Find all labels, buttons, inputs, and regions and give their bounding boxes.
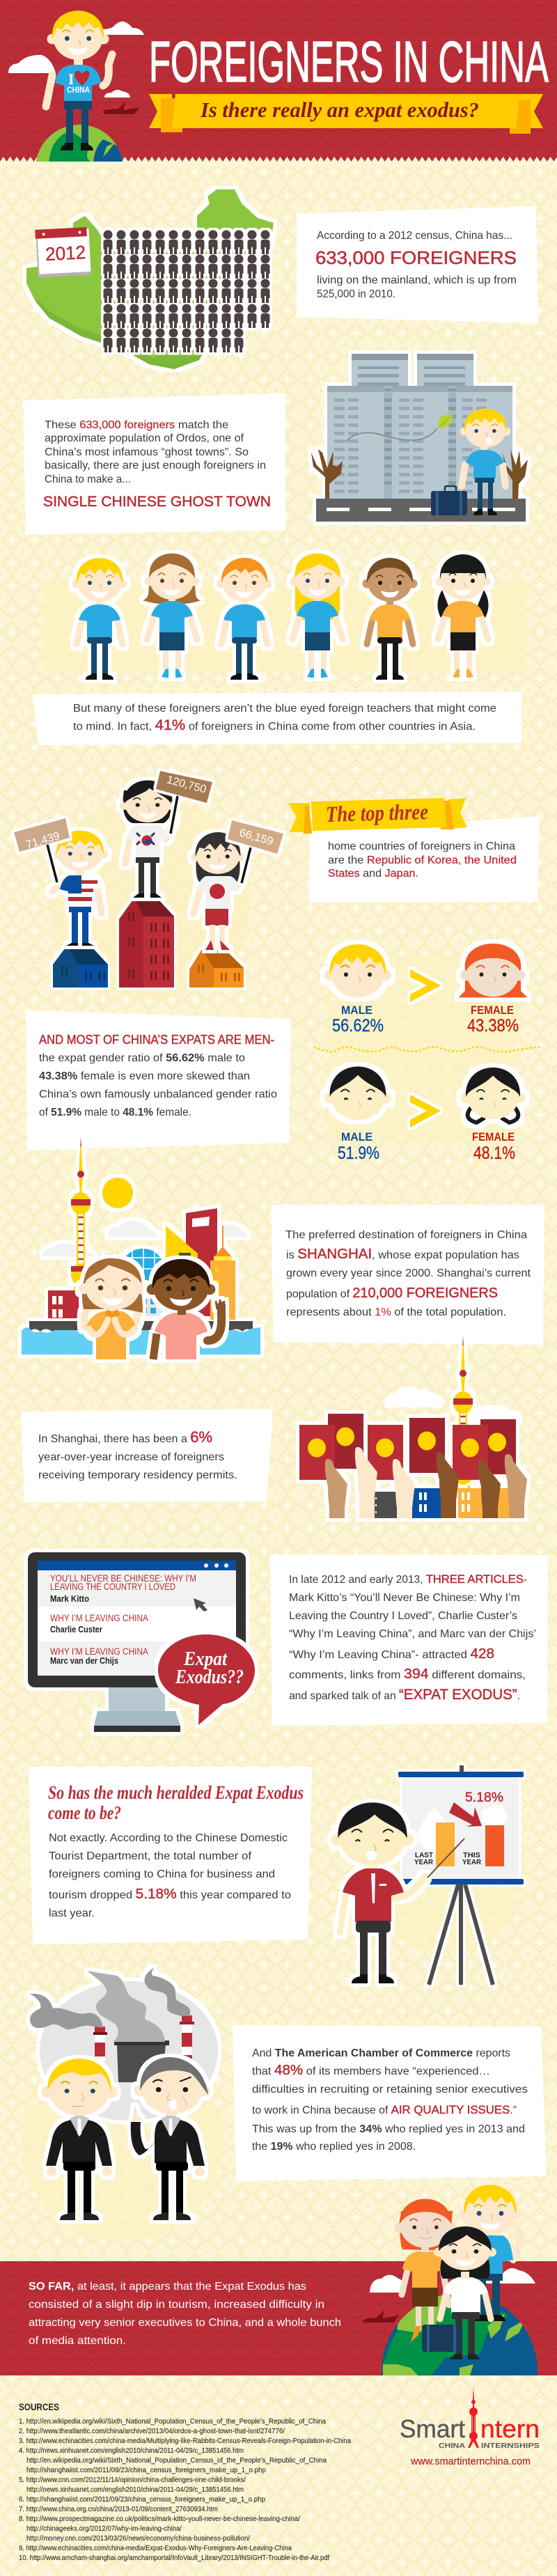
speech bubble: Expat Exodus??: Exodus?? [175, 1666, 244, 1688]
monitor article list: LEAVING THE COUNTRY I LOVED [50, 1582, 175, 1592]
panel: ghost town text: China to make a... [45, 474, 131, 485]
character: boy in I love China shirt [46, 10, 112, 150]
raised hands [323, 1447, 531, 1522]
panel: most expats are men: the expat gender ratio of 56.62% male to [39, 1052, 245, 1064]
panel: three articles: “Why I’m Leaving China”, and Marc van der Chijs’ [289, 1628, 536, 1640]
label: this year [462, 1851, 481, 1866]
subtitle: Is there really an expat exodus? [200, 97, 479, 122]
city buildings [372, 1492, 398, 1518]
monitor article list: Mark Kitto [50, 1593, 89, 1604]
panel: the top three: home countries of foreigners in China [328, 841, 515, 852]
icon: plane [363, 2310, 399, 2323]
panel: exodus question: Tourist Department, the total number of [49, 1850, 252, 1862]
illustration: presenter and flip chart [331, 1765, 524, 1985]
sources list: 3. http://www.echinacities.com/china-media/Multiplying-like-Rabbits-Census-Reveals-Foreign-Population-in-China [19, 2437, 351, 2445]
monitor article list: WHY I’M LEAVING CHINA [50, 1646, 148, 1657]
panel: three articles: “Why I’m Leaving China”- attracted 428 [289, 1646, 494, 1662]
illustration: monitor with articles [28, 1552, 246, 1732]
monitor article list: Marc van der Chijs [50, 1655, 118, 1666]
clouds [389, 1391, 519, 1421]
sources list: http://shanghaiist.com/2011/09/23/china_census_foreigners_make_up_1_o.php [26, 2466, 266, 2474]
panel: Shanghai: population of 210,000 FOREIGNERS [286, 1286, 498, 1301]
label: last year: YEAR [414, 1858, 433, 1866]
panel: most expats are men: 43.38% female is even more skewed than [39, 1070, 250, 1082]
panel: three articles: Leaving the Country I Loved”, Charlie Custer’s [289, 1610, 517, 1622]
sign: 71,439 [14, 818, 70, 882]
pale circle behind presenter [366, 1793, 526, 1953]
characters: six foreigners [72, 554, 490, 680]
panel: Shanghai: The preferred destination of foreigners in China [285, 1229, 527, 1241]
panel: the top three: States and Japan. [328, 868, 418, 880]
population pictogram: 633,000 foreigners [103, 230, 270, 352]
panel: census: living on the mainland, which is up from [317, 274, 517, 286]
person: blonde woman [290, 554, 345, 678]
panel: air quality: This was up from the 34% who replied yes in 2013 and [252, 2123, 525, 2135]
character: boy in I love China shirt: I [68, 70, 74, 88]
clouds [43, 1221, 248, 1256]
icon: mouse cursor [194, 1598, 207, 1611]
sign: 71,439: 71,439 [24, 830, 61, 851]
panel: three articles: and sparked talk of an “EXPAT EXODUS”. [289, 1687, 520, 1703]
panel: Shanghai: represents about 1% of the total population. [286, 1306, 506, 1318]
panel: ghost town text: basically, there are just enough foreigners in [45, 460, 266, 471]
icon: globe [382, 2294, 538, 2375]
logo: Smart Intern [400, 2387, 540, 2467]
chart: expat gender ratio [315, 944, 542, 1163]
chart: expat gender ratio: FEMALE [472, 1130, 515, 1143]
panel: ghost town text: approximate population of Ordos, one of [45, 432, 244, 444]
pale band behind people [43, 581, 526, 671]
sources list: 7. http://www.china.org.cn/china/2013-01/09/content_27630934.htm [19, 2505, 218, 2513]
label: 5.18%: 5.18% [465, 1790, 503, 1805]
sign: 66,159 [228, 820, 283, 883]
boat [29, 1321, 253, 1332]
person: Korean with flag shirt [120, 781, 175, 898]
person: grey-haired executive [131, 2057, 210, 2220]
character: lone boy with suitcase [431, 409, 510, 515]
chart: expat gender ratio: 56.62% [332, 1016, 384, 1036]
label: this year: YEAR [462, 1858, 481, 1866]
panel: census [297, 206, 538, 323]
sources list: http://news.xinhuanet.com/english2010/china/2011-04/29/c_13851456.htm [26, 2485, 244, 2494]
monitor article list: YOU’LL NEVER BE CHINESE: WHY I’M [50, 1573, 196, 1584]
sources list [19, 2401, 351, 2562]
panel: exodus question: tourism dropped 5.18% this year compared to [49, 1887, 291, 1902]
illustration: friends on globe [363, 2185, 538, 2375]
icon: suitcase [431, 486, 467, 515]
sources list: 2. http://www.theatlantic.com/china/archive/2013/04/ordos-a-ghost-town-that-isnt/274776/ [19, 2427, 285, 2435]
panel: most expats are men: AND MOST OF CHINA’S EXPATS ARE MEN- [39, 1033, 274, 1047]
panel: Shanghai: is SHANGHAI, whose expat population has [286, 1247, 519, 1262]
panel: most expats are men: of 51.9% male to 48.1% female. [39, 1107, 191, 1118]
panel: exodus question: last year. [49, 1907, 95, 1919]
sources list: 4. http://news.xinhuanet.com/english2010/china/2011-04/29/c_13851456.htm [19, 2446, 244, 2455]
panel: three articles: comments, links from 394 different domains, [289, 1666, 526, 1682]
smoke [30, 1994, 103, 2029]
logo: Smart Intern: Smart [400, 2414, 465, 2443]
person: boy waving [147, 1259, 224, 1359]
panel: 6% increase: year-over-year increase of foreigners [38, 1451, 224, 1463]
chart: expat gender ratio: 51.9% [338, 1143, 379, 1163]
person: red-haired girl [394, 2199, 457, 2342]
face: expat female [458, 944, 528, 997]
person: American with flag shirt [52, 831, 108, 946]
face: Chinese male [324, 1067, 391, 1120]
person: girl with clasped hands [79, 1258, 147, 1359]
subtitle ribbon [149, 94, 543, 134]
sources list: http://chinageeks.org/2012/07/why-im-leaving-china/ [26, 2524, 182, 2533]
panel: most expats are men [26, 1010, 291, 1150]
logo: Smart Intern: CHINA [439, 2442, 465, 2450]
monitor article list: WHY I’M LEAVING CHINA [50, 1613, 148, 1623]
sources list: SOURCES [19, 2401, 59, 2412]
person: Asian woman [436, 554, 490, 678]
sign: 120,750: 120,750 [166, 774, 207, 796]
person: red-haired man [217, 558, 272, 680]
panel: 41% from Asia [33, 692, 521, 745]
building: Korea [119, 898, 174, 988]
footer banner: conclusion [0, 2261, 557, 2375]
panel: 41% from Asia: But many of these foreigners aren’t the blue eyed foreign teachers that might come [73, 703, 496, 715]
arrow down [449, 1802, 482, 1827]
sources list: 6. http://shanghaiist.com/2011/09/23/china_census_foreigners_make_up_1_o.php [19, 2495, 265, 2504]
logo: Smart Intern: www.smartinternchina.com [410, 2456, 531, 2467]
panel: 41% from Asia: to mind. In fact, 41% of foreigners in China come from other countries in Asia. [73, 717, 476, 733]
pale circle behind executives [21, 2040, 223, 2242]
label: this year: THIS [463, 1851, 480, 1859]
pointer stick [427, 1839, 464, 1878]
footer banner: conclusion: attracting very senior executives to China, and a whole bunch [29, 2317, 341, 2329]
label: last year [414, 1851, 434, 1866]
panel: ghost town text [23, 393, 285, 535]
person: presenter [331, 1802, 425, 1983]
chart: expat gender ratio: FEMALE [471, 1004, 514, 1017]
illustration: empty ghost town buildings [311, 354, 528, 522]
person: blonde boy waving [459, 2185, 521, 2321]
bars [436, 1822, 455, 1866]
clouds [370, 2268, 535, 2293]
front passports [299, 1425, 488, 1480]
flip chart [398, 1765, 524, 1985]
monitor article list: Charlie Custer [50, 1624, 102, 1634]
person: brown-haired woman [143, 554, 201, 678]
panel: ghost town text: China’s most infamous “ghost towns”. So [45, 446, 249, 458]
sources list: 9. http://www.echinacities.com/china-media/Expat-Exodus-Why-Foreigners-Are-Leaving-China [19, 2544, 292, 2552]
chart: expat gender ratio: 48.1% [473, 1143, 515, 1163]
footer banner: conclusion: SO FAR, at least, it appears that the Expat Exodus has [29, 2281, 306, 2293]
sources list: http://en.wikipedia.org/wiki/Sixth_National_Population_Census_of_the_People’s_Republic_of_China [26, 2456, 327, 2465]
panel: air quality: the 19% who replied yes in 2008. [252, 2141, 416, 2153]
person: blonde man [72, 558, 127, 680]
person: dark-skinned man [362, 558, 418, 680]
panel: three articles [270, 1554, 548, 1726]
logo: Smart Intern: ntern [480, 2414, 540, 2443]
back passports [328, 1414, 516, 1474]
panel: census: 525,000 in 2010. [317, 288, 395, 300]
pale circle behind top three [49, 797, 251, 999]
chart: expat gender ratio: MALE [341, 1130, 372, 1143]
monitor article list [50, 1573, 207, 1666]
Oriental Pearl Tower [453, 1336, 473, 1510]
icon: plane [103, 102, 139, 114]
illustration: Shanghai skyline with friends [22, 1137, 260, 1359]
panel: the top three: are the Republic of Korea, the United [328, 854, 517, 866]
building: Japan [189, 949, 244, 988]
panel: air quality: that 48% of its members have “experienced… [252, 2063, 490, 2078]
panel: 6% increase: In Shanghai, there has been a 6% [38, 1428, 212, 1446]
panel: three articles: Mark Kitto’s “You’ll Never Be Chinese: Why I’m [289, 1592, 520, 1604]
characters: two executives [41, 2057, 210, 2220]
face: expat male [324, 944, 391, 997]
character: boy in I love China shirt: CHINA [67, 85, 90, 95]
panel: air quality: to work in China because of AIR QUALITY ISSUES.” [252, 2103, 517, 2116]
face: Chinese female [460, 1068, 526, 1123]
icon: greater than [410, 1095, 441, 1127]
illustration: blowing leaf [345, 414, 453, 442]
panel: exodus question: come to be? [48, 1802, 121, 1823]
characters: top three countries on buildings [14, 771, 283, 988]
footer banner: conclusion: of media attention. [29, 2335, 126, 2347]
sources list: 10. http://www.amcham-shanghai.org/amchamportal/InfoVault_Library/2013/INSIGHT-Trouble-in-the-Air.pdf [19, 2554, 329, 2562]
speech bubble: Expat Exodus??: Expat [183, 1648, 228, 1670]
panel: three articles: In late 2012 and early 2013, THREE ARTICLES- [289, 1572, 527, 1586]
buildings [186, 1208, 217, 1316]
sources list: http://money.cnn.com/2013/03/26/news/economy/china-business-pollution/ [26, 2534, 250, 2543]
icon: 2012 calendar [35, 227, 91, 278]
person: Asian girl with suitcase [422, 2226, 496, 2359]
illustration: hands holding passports [296, 1336, 531, 1522]
ribbon: the top three [288, 798, 467, 834]
map of China [26, 189, 274, 369]
icon: greater than [410, 969, 441, 1002]
icon: globe with boy [36, 125, 123, 162]
pale band behind gender faces [327, 954, 519, 1142]
Oriental Pearl Tower [71, 1137, 91, 1311]
sources list: 5. http://www.cnn.com/2012/11/14/opinion/china-challenges-one-child-brooks/ [19, 2476, 246, 2484]
chart: expat gender ratio: MALE [341, 1004, 372, 1017]
stat: 633,000 foreigners: 633,000 FOREIGNERS [315, 247, 517, 268]
sign: 66,159: 66,159 [237, 827, 274, 848]
icon: 2012 calendar: 2012 [45, 242, 86, 265]
footer banner: conclusion: consisted of a slight dip in tourism, increased difficulty in [29, 2299, 324, 2311]
sources list: 8. http://www.prospectmagazine.co.uk/politics/mark-kitto-youll-never-be-chinese-leaving-china/ [19, 2515, 300, 2523]
sun [102, 1178, 133, 1208]
chart: expat gender ratio: 43.38% [467, 1016, 519, 1036]
sources list: 1. http://en.wikipedia.org/wiki/Sixth_National_Population_Census_of_the_People’s_Republic_of_China [19, 2417, 326, 2426]
panel: air quality [233, 2025, 547, 2181]
water [22, 1327, 260, 1355]
panel: exodus question [29, 1767, 312, 1944]
sign: 120,750 [156, 771, 212, 834]
heading: single Chinese ghost town: SINGLE CHINESE GHOST TOWN [43, 494, 271, 510]
heading: So has the much heralded Expat Exodus [48, 1782, 304, 1803]
panel: exodus question: foreigners coming to China for business and [49, 1868, 275, 1880]
panel: ghost town text: These 633,000 foreigners match the [45, 419, 228, 431]
panel: air quality: difficulties in recruiting or retaining senior executives [252, 2084, 528, 2095]
panel: most expats are men: China’s own famously unbalanced gender ratio [39, 1088, 277, 1100]
icon: suitcase [422, 2325, 462, 2352]
ribbon: the top three: The top three [325, 799, 428, 827]
person: blonde executive [41, 2059, 118, 2220]
clouds in header [8, 22, 144, 97]
logo tower [468, 2387, 479, 2448]
speech bubble: Expat Exodus?? [158, 1634, 255, 1725]
illustration: factory pollution [30, 1967, 218, 2121]
header banner [0, 0, 557, 167]
panel: census: According to a 2012 census, China has... [317, 230, 512, 242]
label: last year: LAST [415, 1851, 434, 1859]
panel: exodus question: Not exactly. According to the Chinese Domestic [49, 1832, 288, 1844]
panel: 6% increase [21, 1409, 273, 1502]
panel: the top three [288, 798, 540, 903]
person: Japanese with flag shirt [191, 832, 245, 950]
building: USA [53, 946, 108, 988]
logo: Smart Intern: INTERNSHIPS [481, 2442, 540, 2450]
panel: 6% increase: receiving temporary residency permits. [38, 1469, 237, 1481]
panel: air quality: And The American Chamber of Commerce reports [252, 2047, 510, 2059]
panel: Shanghai [271, 1205, 544, 1345]
panel: Shanghai: grown every year since 2000. Shanghai’s current [286, 1267, 531, 1279]
